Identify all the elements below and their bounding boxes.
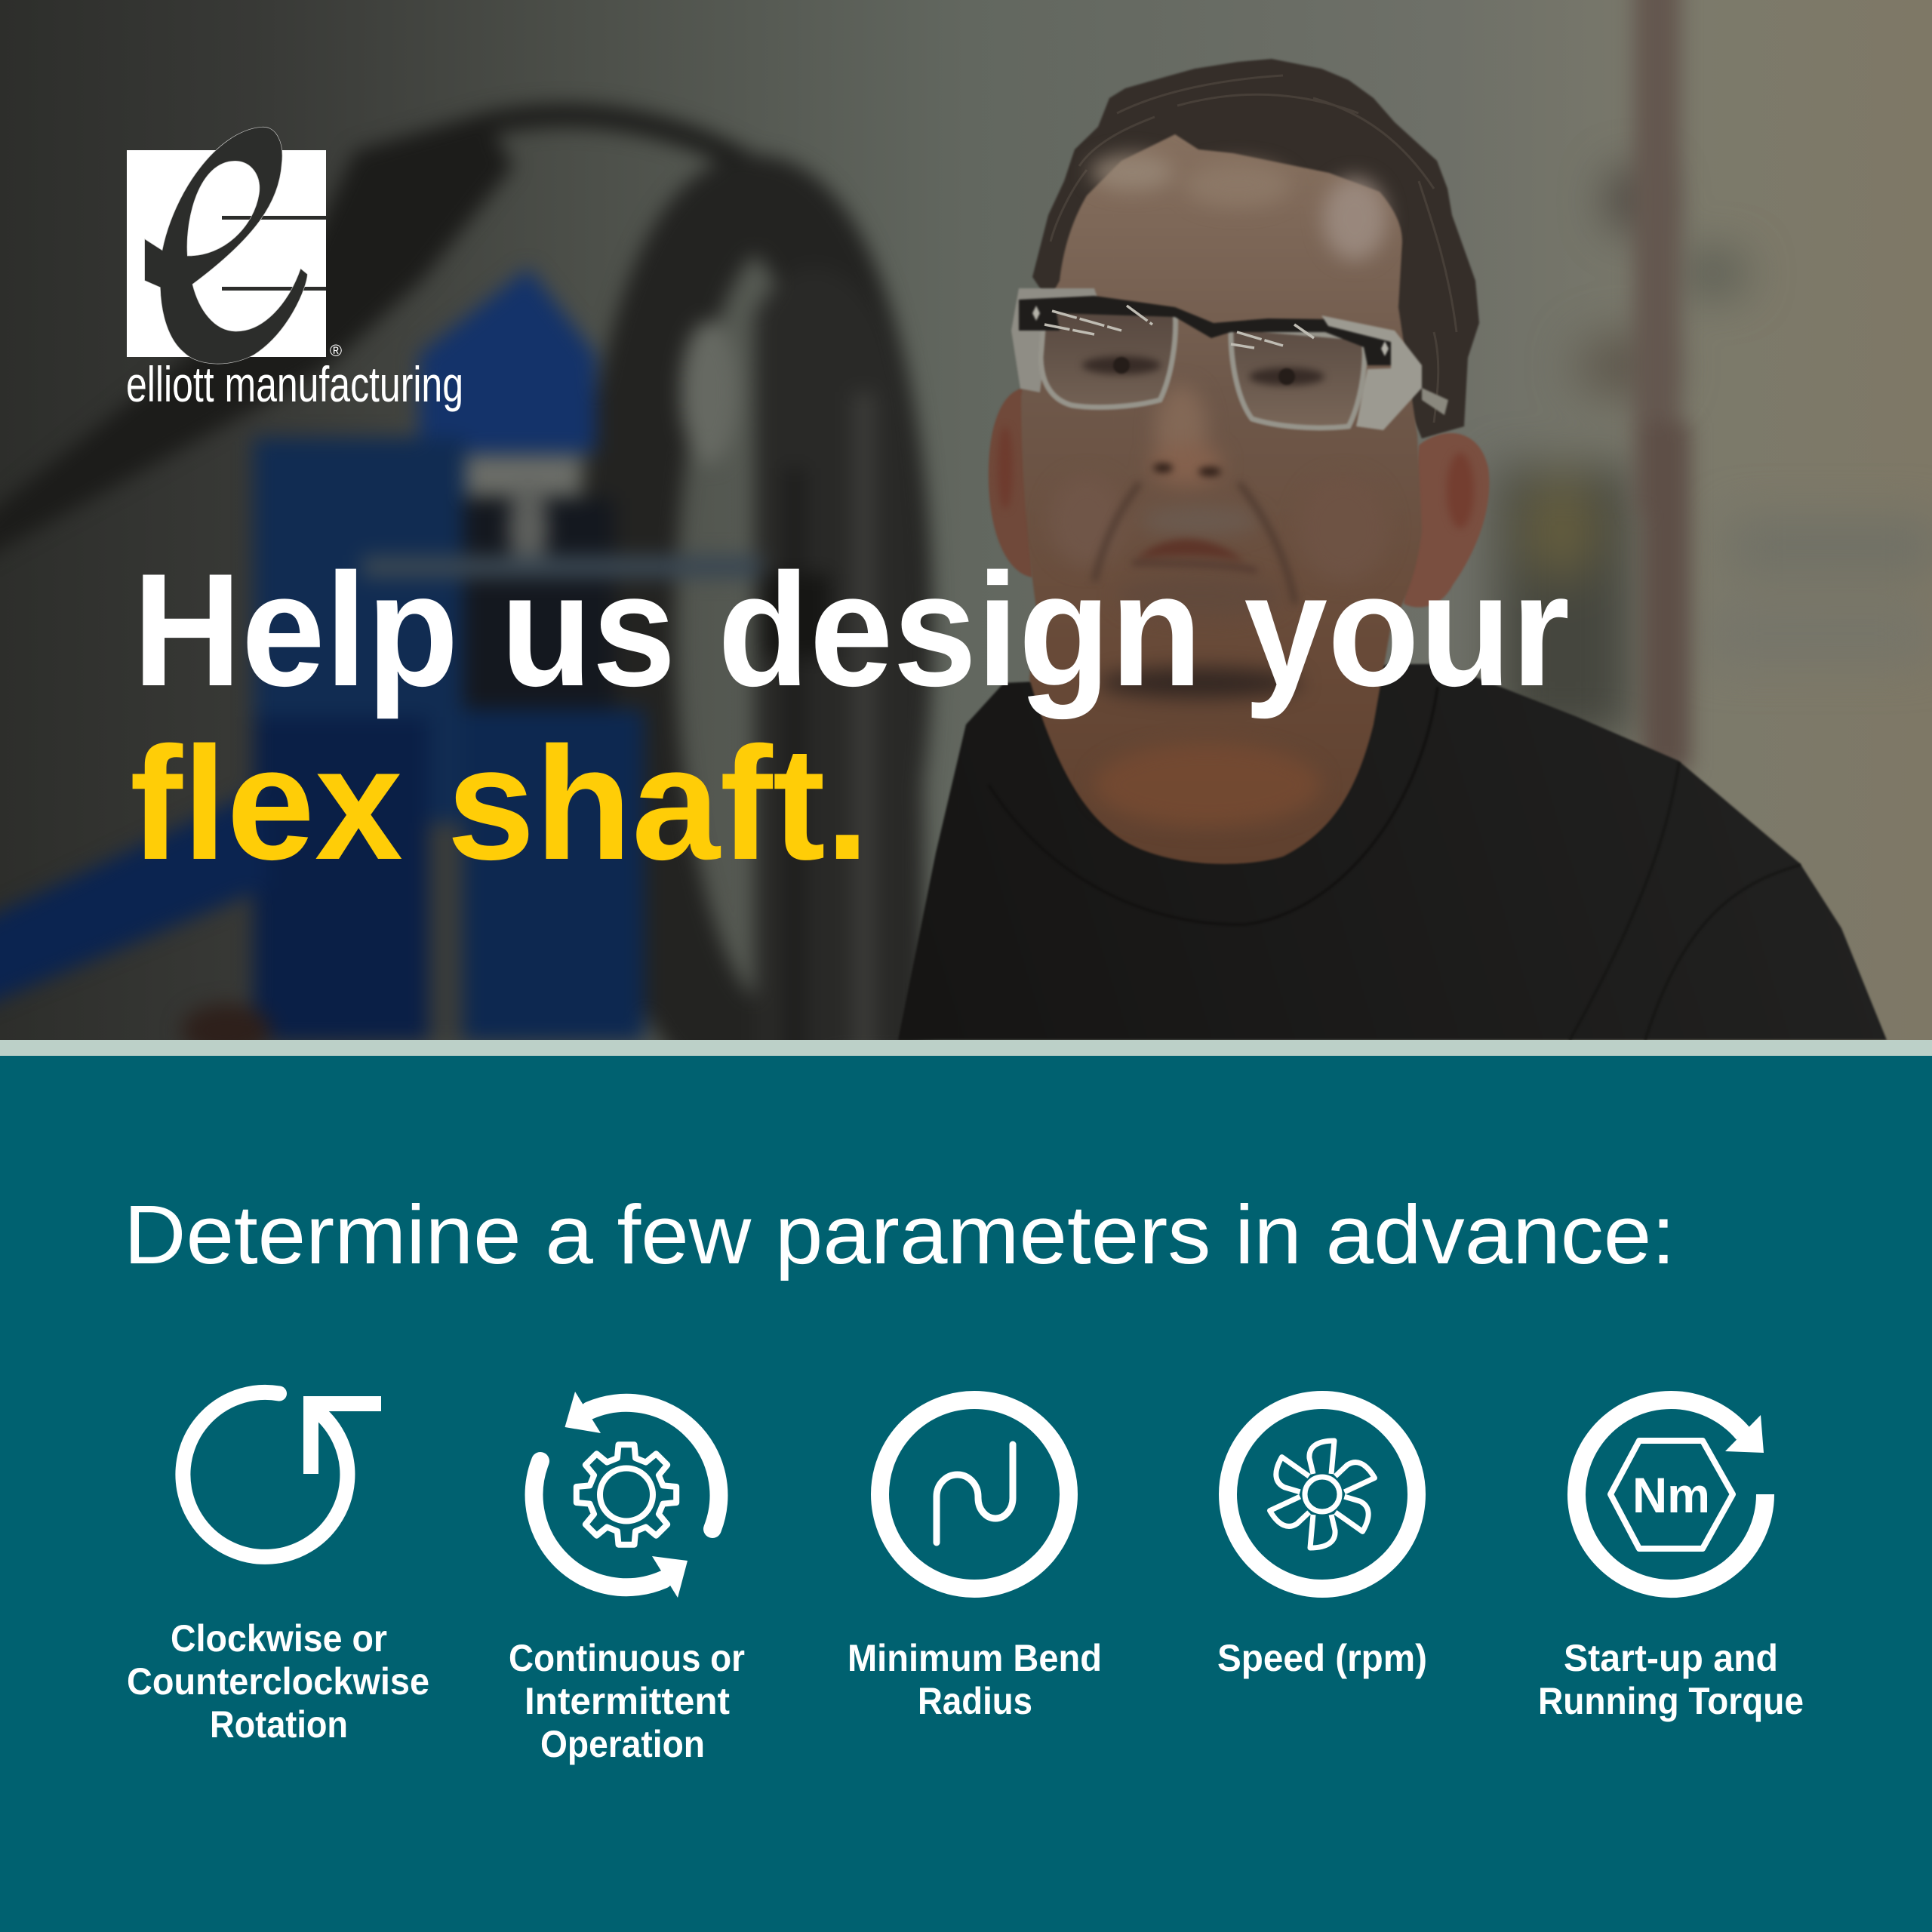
- label: operation: Continuous or: [509, 1637, 745, 1679]
- label: torque: [1538, 1637, 1804, 1722]
- headline: [130, 540, 1570, 894]
- label: torque: Running Torque: [1538, 1680, 1804, 1722]
- label: rotation: Counterclockwise: [127, 1660, 429, 1703]
- right ear: [1404, 433, 1489, 608]
- face shading: [1049, 154, 1389, 826]
- headline: Help us design your: [133, 540, 1570, 720]
- icon: gear with cycle arrows: [534, 1392, 718, 1598]
- headline: flex shaft.: [130, 714, 869, 894]
- pale divider band: [0, 1040, 1932, 1056]
- label: bend radius: Radius: [918, 1680, 1032, 1722]
- label: bend radius: [848, 1637, 1102, 1722]
- hero photo: worker and machinery: [0, 0, 1932, 1057]
- hair strands: [1051, 75, 1457, 423]
- label: rotation: Clockwise or: [171, 1617, 387, 1660]
- eyes and lens reflections: [1044, 306, 1324, 386]
- safety glasses: [1011, 288, 1448, 430]
- label: rotation: Rotation: [210, 1703, 348, 1746]
- icon: bend radius: [880, 1400, 1069, 1589]
- logo: elliott manufacturing: ®: [330, 341, 342, 360]
- label: torque: Start-up and: [1564, 1637, 1778, 1679]
- mouth, folds and nostrils: [1094, 463, 1295, 604]
- blue machine body: [419, 268, 596, 453]
- icon: torque hexagon: [1577, 1400, 1765, 1589]
- left ear: [989, 388, 1032, 577]
- label: operation: [509, 1637, 745, 1765]
- face and neck: [1021, 134, 1422, 864]
- label: speed: Speed (rpm): [1217, 1637, 1427, 1679]
- shirt: [898, 664, 1887, 1040]
- label: rotation: [127, 1617, 429, 1746]
- subheading: Determine a few parameters in advance:: [124, 1189, 1675, 1281]
- label: operation: Operation: [540, 1723, 705, 1765]
- icon: fan speed: [1228, 1400, 1417, 1589]
- teal background panel: [0, 1056, 1932, 1932]
- icon: rotation direction: [183, 1392, 381, 1557]
- hair: [1032, 59, 1479, 438]
- wheel: [626, 204, 883, 1049]
- blurred right-hand wall details: [1497, 171, 1932, 740]
- shirt collar and seams: [1315, 688, 1801, 1040]
- label: operation: Intermittent: [525, 1680, 730, 1722]
- blurred workshop background: [0, 0, 1690, 1057]
- logo: elliott manufacturing: elliott manufacturing: [126, 356, 463, 412]
- dark machine arm: [0, 113, 513, 566]
- logo: elliott manufacturing: [126, 127, 463, 412]
- icon: torque hexagon: Nm: [1632, 1467, 1710, 1523]
- sideburn: [1022, 392, 1034, 445]
- label: bend radius: Minimum Bend: [848, 1637, 1102, 1679]
